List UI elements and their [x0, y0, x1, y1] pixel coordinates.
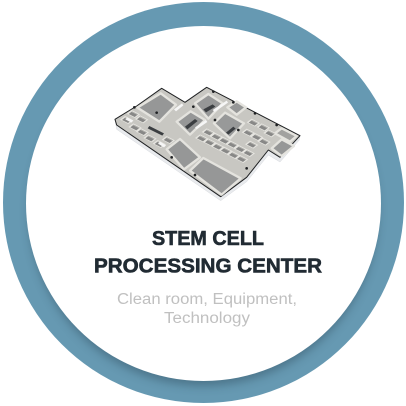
exterior side walls: [115, 119, 300, 201]
title: PROCESSING CENTER: [94, 256, 323, 278]
small rooms right: [242, 119, 277, 149]
large rooms: [137, 93, 297, 195]
subtitle: Clean room, Equipment,: [117, 291, 297, 308]
small rooms centre: [195, 128, 255, 163]
building top surface: [115, 87, 300, 197]
small rooms left: [120, 110, 175, 148]
dark wall columns: [133, 90, 278, 176]
dark equipment: [148, 104, 236, 136]
white corridors: [125, 101, 228, 147]
inner white circle: [26, 26, 381, 381]
subtitle: [117, 291, 297, 327]
title: STEM CELL: [152, 228, 264, 250]
title: [94, 228, 323, 278]
subtitle: Technology: [164, 310, 250, 327]
